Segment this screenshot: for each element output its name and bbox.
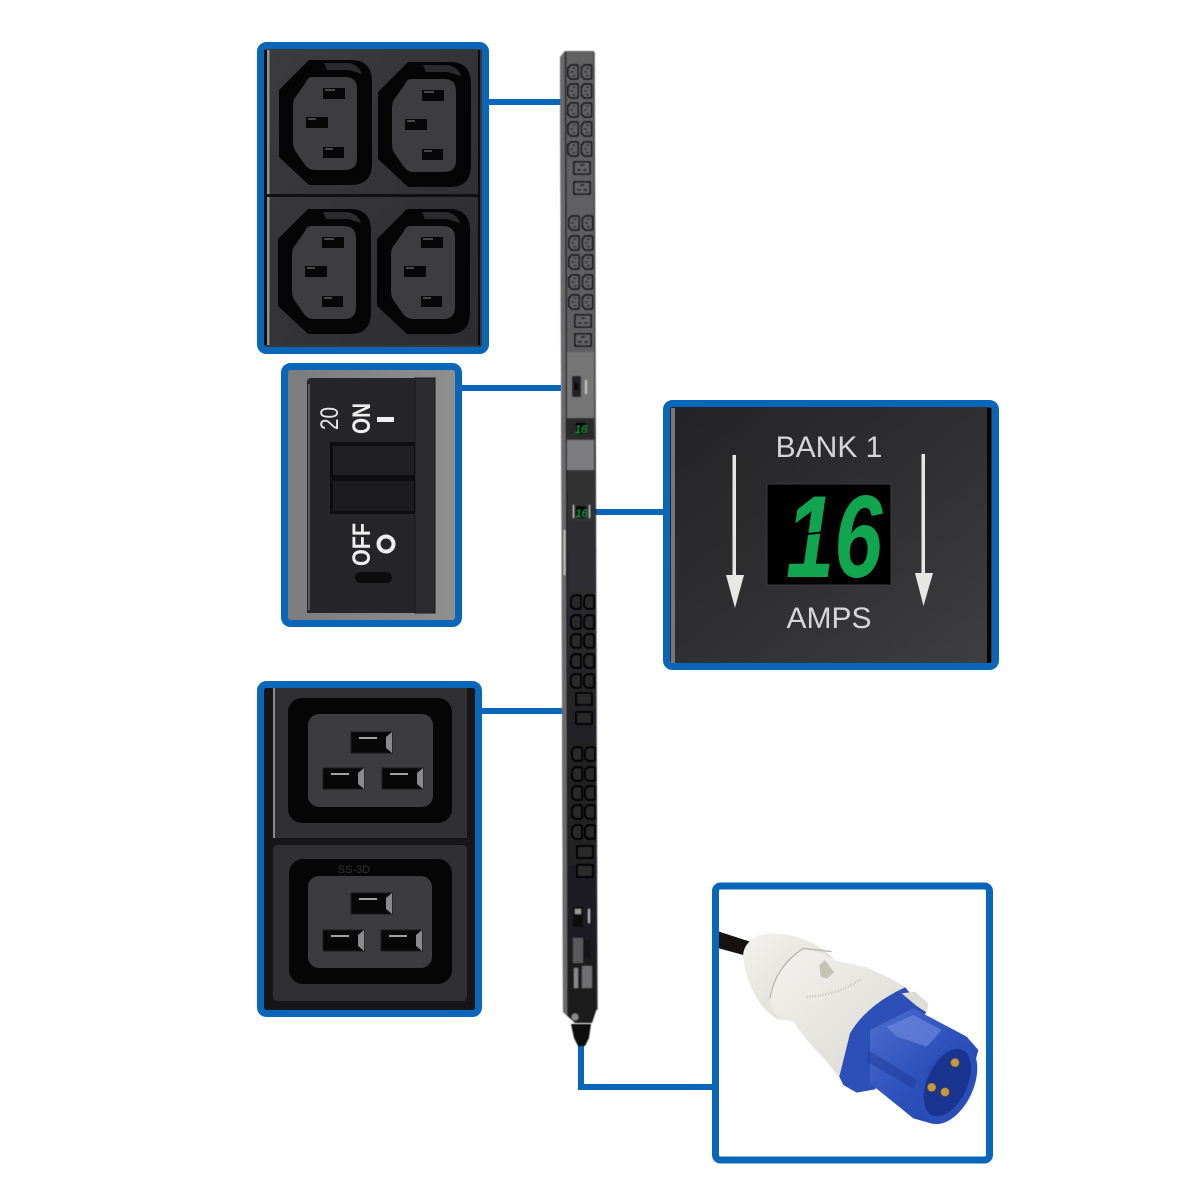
off symbol	[378, 536, 394, 552]
lower switch	[573, 907, 590, 927]
blue flange	[839, 987, 927, 1093]
power cord	[719, 932, 750, 955]
rocker window	[330, 442, 415, 514]
upper C19 plate	[273, 688, 467, 838]
second outlet group	[568, 215, 594, 347]
blank grey section	[567, 440, 594, 470]
moulded marking: SS-3D	[338, 864, 370, 876]
lower C19 plate	[273, 845, 467, 1001]
blue barrel	[870, 1008, 978, 1124]
outlet bottom right	[377, 209, 470, 334]
left arrow	[726, 455, 744, 608]
body ribbing	[807, 978, 862, 997]
third outlet group	[570, 594, 595, 725]
PDU vertical power strip	[560, 51, 597, 1046]
slot	[355, 572, 392, 583]
locking tab	[819, 960, 834, 979]
switch body	[307, 378, 435, 613]
amps label: AMPS	[786, 602, 872, 635]
mini display 1: 16	[575, 424, 588, 436]
mini display 2: 16	[575, 508, 588, 520]
breaker section	[567, 352, 594, 418]
mini display 2	[573, 505, 590, 520]
ground bolt	[572, 1014, 578, 1020]
plug face	[908, 1035, 989, 1133]
right arrow	[915, 454, 933, 606]
panel: breaker switch	[284, 366, 458, 624]
off label: OFF	[348, 523, 376, 566]
side lettering strip	[564, 530, 566, 575]
upper outlet group	[567, 64, 592, 195]
on symbol	[377, 417, 394, 422]
fourth outlet group	[571, 746, 596, 878]
rear cap	[743, 934, 833, 1020]
panel: C13 outlets	[260, 46, 486, 350]
panel: bank 1 amps display	[666, 404, 996, 666]
LED display: 16	[786, 471, 883, 602]
brass pins	[927, 1058, 959, 1096]
outlet top left	[279, 60, 372, 185]
connector lines	[458, 99, 716, 1090]
on label: ON	[348, 403, 376, 434]
specification label	[573, 938, 592, 988]
outlet top right	[378, 62, 471, 187]
plug illustration	[719, 932, 989, 1133]
panel: IEC plug	[716, 886, 990, 1160]
white tab	[902, 992, 928, 1013]
mini breaker switch	[572, 376, 587, 397]
mini display 1	[567, 418, 594, 439]
main white body	[771, 951, 908, 1078]
cord gland	[571, 1024, 591, 1046]
rating label: 20	[316, 407, 344, 430]
outlet bottom left	[278, 209, 371, 334]
panel: C19 outlets	[260, 684, 478, 1014]
bank label: BANK 1	[776, 431, 882, 464]
